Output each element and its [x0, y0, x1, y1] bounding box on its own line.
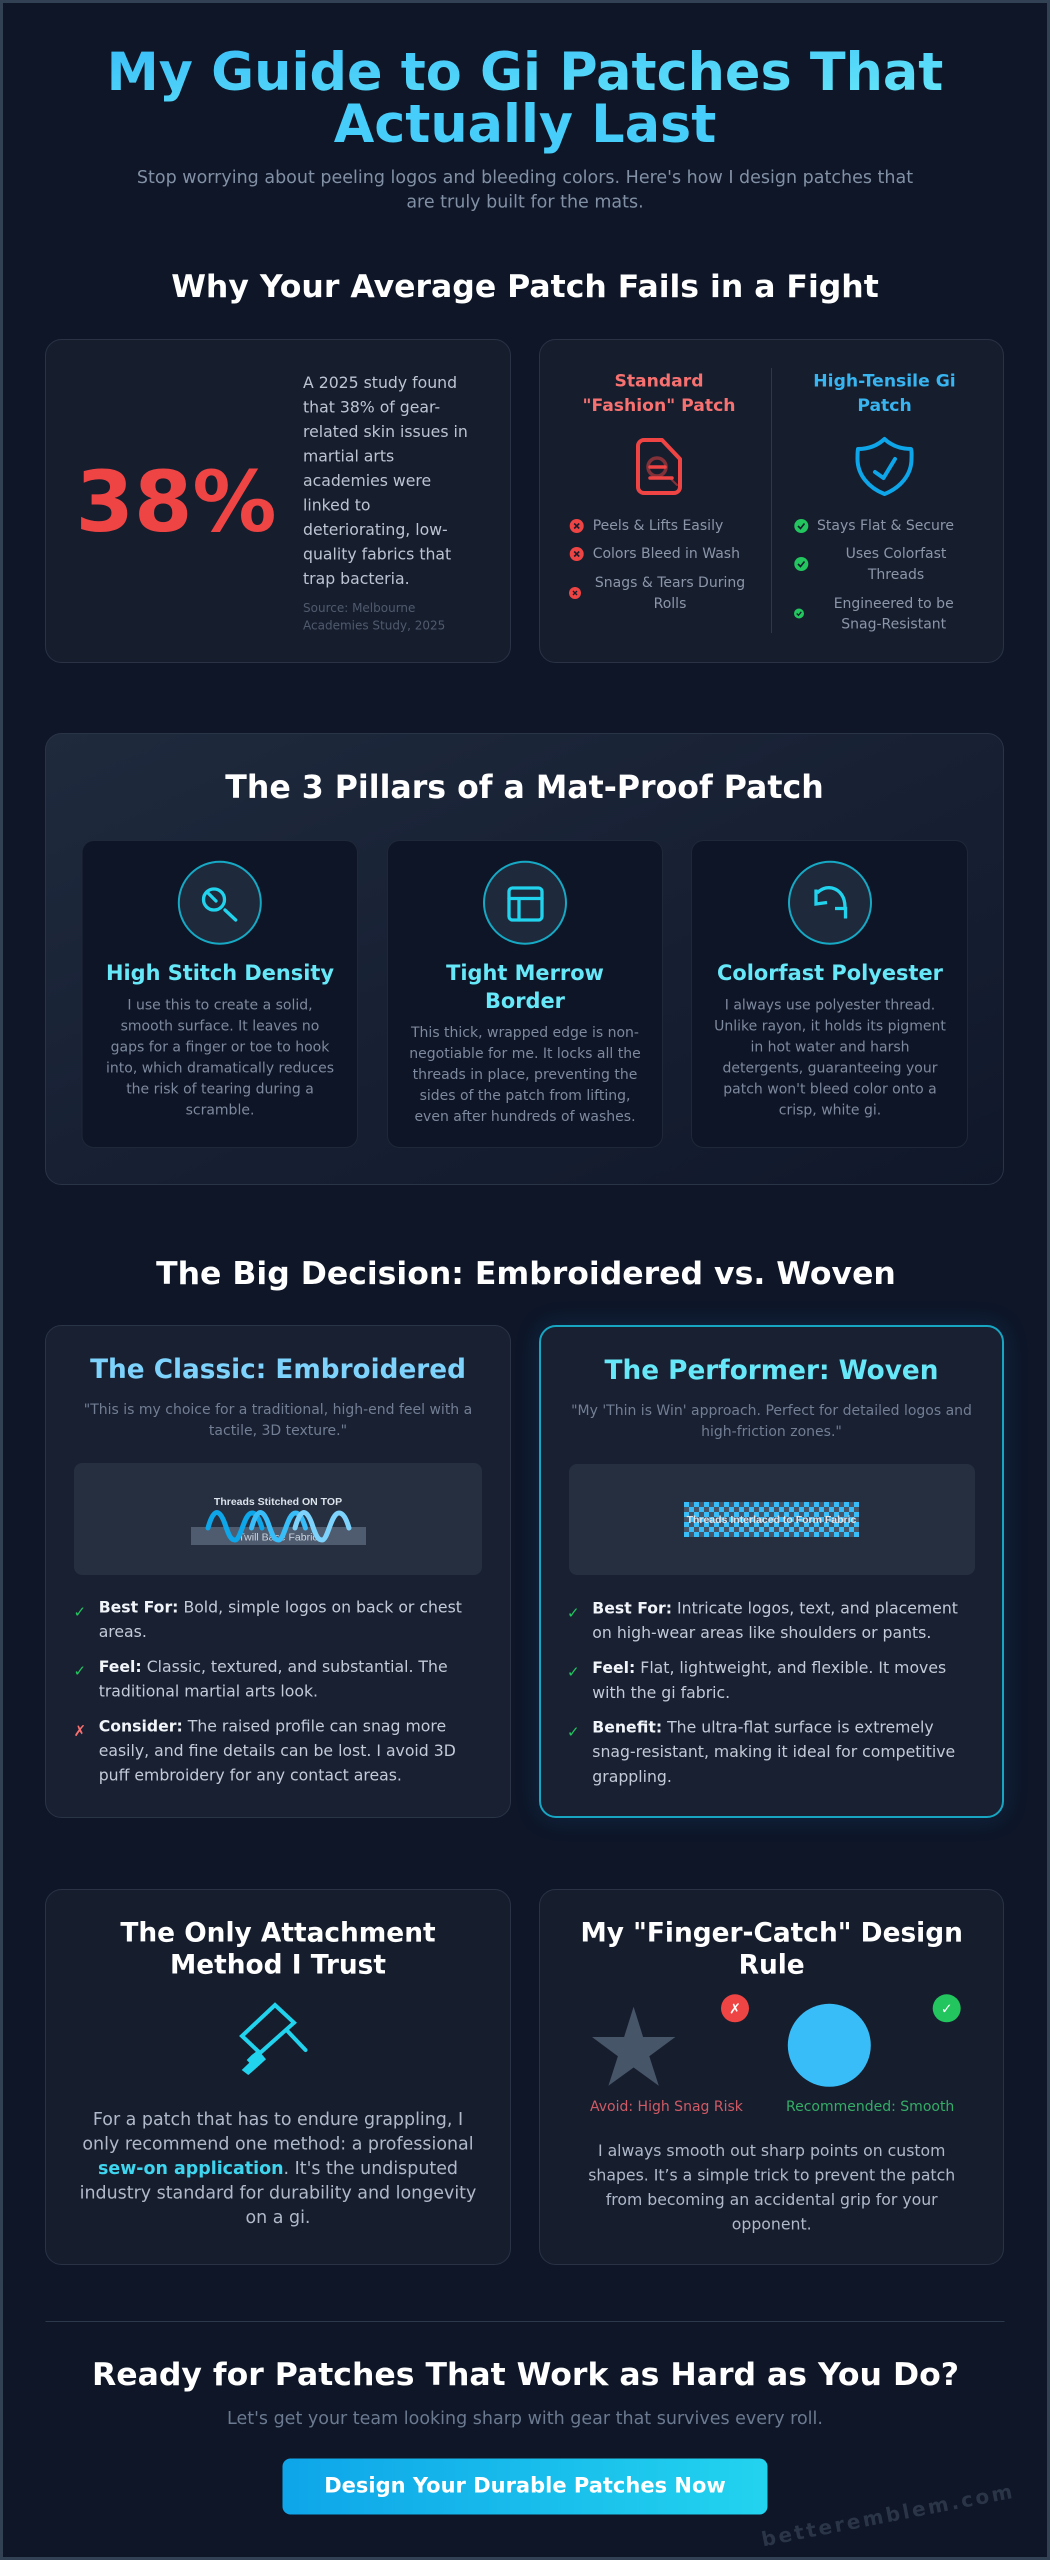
panel: patch comparison — [540, 340, 1004, 662]
panel heading: Rule — [739, 1949, 805, 1980]
label: recommended: Recommended: Smooth — [786, 2099, 954, 2115]
card text: I always use polyester thread. — [725, 998, 935, 1014]
list: woven points: on high-wear areas like shoulders or pants. — [592, 1623, 931, 1642]
body text: For a patch that has to endure grappling, I — [93, 2110, 463, 2130]
body text — [80, 2110, 476, 2228]
study text: martial arts — [303, 446, 394, 466]
card text: Unlike rayon, it holds its pigment — [714, 1018, 946, 1034]
body text: on a gi. — [246, 2208, 310, 2228]
list: embroidered points: traditional martial arts look. — [99, 1682, 318, 1701]
panel heading — [120, 1918, 436, 1980]
diagram: stitched threads: Twill Base Fabric — [238, 1532, 318, 1544]
body text: only recommend one method: a professional — [82, 2134, 474, 2154]
study text: academies were — [303, 471, 431, 490]
panel heading: The Only Attachment — [120, 1918, 436, 1949]
source — [303, 601, 445, 632]
heading: big decision: The Big Decision: Embroidered vs. Woven — [156, 1256, 896, 1292]
body text: shapes. It’s a simple trick to prevent the patch — [588, 2166, 955, 2184]
list: woven points: Best For: Intricate logos, text, and placement — [592, 1598, 958, 1617]
panel: embroidered — [46, 1326, 510, 1818]
card text: in hot water and harsh — [750, 1040, 910, 1056]
card heading: Border — [485, 989, 566, 1013]
icon: sewing tool — [242, 2005, 306, 2075]
card text: the risk of tearing during a — [126, 1082, 314, 1098]
badge: avoid: ✗ — [729, 2002, 741, 2018]
list: high-tensile patch benefits: Uses Colorfast — [846, 546, 947, 562]
card text: smooth surface. It leaves no — [121, 1018, 319, 1034]
card text: This thick, wrapped edge is non- — [410, 1025, 639, 1041]
heading: why patches fail: Why Your Average Patch Fails in a Fight — [171, 269, 879, 305]
list: woven points: Benefit: The ultra-flat surface is extremely — [592, 1718, 934, 1737]
diagram: stitched threads: Threads Stitched ON TOP — [214, 1496, 342, 1508]
subtitle — [137, 168, 913, 212]
button: Design Your Durable Patches Now — [324, 2474, 726, 2498]
card text — [714, 998, 946, 1118]
card text: into, which dramatically reduces — [106, 1060, 334, 1076]
diagram: interlaced threads: Threads Interlaced to Form Fabric — [687, 1514, 857, 1526]
list: high-tensile patch benefits: Snag-Resistant — [841, 616, 947, 632]
study text: linked to — [303, 496, 371, 514]
card heading: High Stitch Density — [106, 961, 334, 985]
body text: I always smooth out sharp points on custom — [598, 2141, 945, 2160]
header — [107, 42, 943, 212]
list: standard patch faults: Colors Bleed in Wash — [593, 546, 740, 562]
card: tight merrow border — [388, 840, 662, 1148]
heading: high-tensile patch — [813, 372, 956, 416]
study text — [303, 373, 468, 588]
panel heading: Method I Trust — [170, 1949, 386, 1980]
badge: avoid — [721, 1994, 749, 2022]
icon: layout frame — [484, 862, 566, 944]
body text: opponent. — [732, 2214, 812, 2234]
heading: high-tensile patch: High-Tensile Gi — [813, 372, 956, 392]
list: embroidered points: ✓ — [74, 1603, 86, 1621]
card heading — [446, 961, 604, 1013]
study text: deteriorating, low- — [303, 520, 448, 539]
badge: recommended — [933, 1994, 961, 2022]
source: Source: Melbourne — [303, 601, 415, 615]
study text: quality fabrics that — [303, 544, 451, 564]
icon: shield check — [858, 439, 912, 494]
list: woven points: ✓ — [567, 1723, 580, 1741]
panel: finger-catch rule — [540, 1890, 1004, 2264]
quote: "My 'Thin is Win' approach. Perfect for detailed logos and — [571, 1403, 972, 1419]
card: colorfast polyester — [692, 840, 968, 1148]
source: Academies Study, 2025 — [303, 618, 445, 632]
diagram: stitched threads — [74, 1463, 482, 1575]
study text: trap bacteria. — [303, 569, 410, 588]
study text: that 38% of gear- — [303, 398, 440, 416]
card text — [409, 1025, 641, 1125]
list: embroidered points: Best For: Bold, simple logos on back or chest — [99, 1598, 462, 1617]
quote — [84, 1402, 472, 1439]
list: woven points: grappling. — [592, 1767, 672, 1786]
footer text: Let's get your team looking sharp with gear that survives every roll. — [227, 2409, 823, 2429]
list: woven points: ✓ — [567, 1604, 580, 1622]
shape: smooth circle — [788, 2004, 871, 2087]
heading: high-tensile patch: Patch — [857, 396, 912, 416]
list: high-tensile patch benefits: Stays Flat & Secure — [817, 518, 954, 534]
heading: pillars: The 3 Pillars of a Mat-Proof Patch — [225, 770, 824, 806]
body text: industry standard for durability and longevity — [80, 2184, 476, 2204]
card text: threads in place, preventing the — [413, 1067, 637, 1083]
shape: star to avoid — [592, 2007, 675, 2086]
body text — [588, 2141, 955, 2234]
list: woven points: Feel: Flat, lightweight, and flexible. It moves — [592, 1658, 946, 1677]
footer heading: Ready for Patches That Work as Hard as You Do? — [92, 2357, 959, 2393]
list: standard patch faults: Rolls — [654, 596, 686, 612]
quote: tactile, 3D texture." — [209, 1423, 347, 1439]
panel: woven — [540, 1326, 1003, 1817]
list: embroidered points: ✗ — [74, 1722, 86, 1740]
panel heading — [580, 1918, 963, 1980]
title — [107, 42, 943, 155]
subtitle: Stop worrying about peeling logos and bleeding colors. Here's how I design patches that — [137, 168, 913, 188]
heading: standard patch: Standard — [614, 372, 704, 392]
list: high-tensile patch benefits: Threads — [867, 567, 924, 583]
body text: sew-on application. It's the undisputed — [98, 2159, 458, 2179]
card text: negotiable for me. It locks all the — [409, 1046, 641, 1062]
list: woven points — [567, 1598, 958, 1786]
study text: A 2025 study found — [303, 373, 457, 392]
big number: 38% — [76, 453, 277, 551]
panel: three pillars — [46, 734, 1004, 1184]
list: embroidered points: puff embroidery for any contact areas. — [99, 1766, 402, 1785]
quote: "This is my choice for a traditional, high-end feel with a — [84, 1402, 472, 1418]
list: embroidered points: Feel: Classic, textured, and substantial. The — [99, 1657, 448, 1676]
button — [282, 2458, 768, 2514]
card text: sides of the patch from lifting, — [420, 1088, 630, 1104]
panel heading: The Performer: Woven — [605, 1356, 938, 1386]
list: woven points: ✓ — [567, 1663, 580, 1681]
list: woven points: snag-resistant, making it ideal for competitive — [592, 1742, 955, 1761]
card text: I use this to create a solid, — [127, 998, 313, 1014]
card text: crisp, white gi. — [779, 1102, 881, 1118]
panel: 38% statistic — [46, 340, 510, 662]
footer call to action — [46, 2322, 1004, 2514]
list: standard patch faults: Peels & Lifts Easily — [593, 518, 723, 534]
quote: high-friction zones." — [701, 1424, 842, 1440]
card text: detergents, guaranteeing your — [722, 1060, 938, 1076]
quote — [571, 1403, 972, 1440]
title: My Guide to Gi Patches That — [107, 42, 943, 103]
list: embroidered points: easily, and fine details can be lost. I avoid 3D — [99, 1741, 456, 1760]
card text: patch won't bleed color onto a — [723, 1082, 937, 1098]
diagram: interlaced threads — [569, 1464, 975, 1575]
subtitle: are truly built for the mats. — [406, 192, 644, 212]
heading: standard patch: "Fashion" Patch — [582, 396, 736, 416]
list: embroidered points: ✓ — [74, 1662, 86, 1680]
body text: from becoming an accidental grip for your — [606, 2190, 938, 2209]
panel heading: My "Finger-Catch" Design — [580, 1918, 963, 1949]
badge: recommended: ✓ — [941, 2002, 953, 2018]
list: high-tensile patch benefits — [794, 518, 954, 632]
heading: standard patch — [582, 372, 736, 416]
icon: damaged document — [638, 440, 680, 493]
study text: related skin issues in — [303, 422, 468, 441]
title: Actually Last — [334, 94, 716, 155]
card text — [106, 998, 334, 1118]
card: high stitch density — [82, 840, 358, 1148]
panel heading: The Classic: Embroidered — [90, 1355, 466, 1385]
card text: even after hundreds of washes. — [414, 1109, 636, 1125]
card heading: Colorfast Polyester — [717, 961, 944, 985]
list: embroidered points: Consider: The raised profile can snag more — [99, 1717, 446, 1736]
list: woven points: with the gi fabric. — [592, 1683, 730, 1702]
card text: scramble. — [186, 1102, 254, 1118]
list: standard patch faults — [569, 518, 745, 612]
icon: magnifier — [179, 862, 261, 944]
list: embroidered points: areas. — [99, 1622, 147, 1641]
label: avoid: Avoid: High Snag Risk — [590, 2099, 744, 2115]
list: high-tensile patch benefits: Engineered to be — [834, 596, 954, 612]
icon: undo arrow — [789, 862, 871, 944]
watermark: betteremblem.com — [759, 2479, 1017, 2551]
card heading: Tight Merrow — [446, 961, 604, 985]
card text: gaps for a finger or toe to hook — [111, 1040, 330, 1056]
list: standard patch faults: Snags & Tears During — [595, 575, 745, 591]
panel: attachment method — [46, 1890, 510, 2264]
list: embroidered points — [74, 1598, 462, 1785]
